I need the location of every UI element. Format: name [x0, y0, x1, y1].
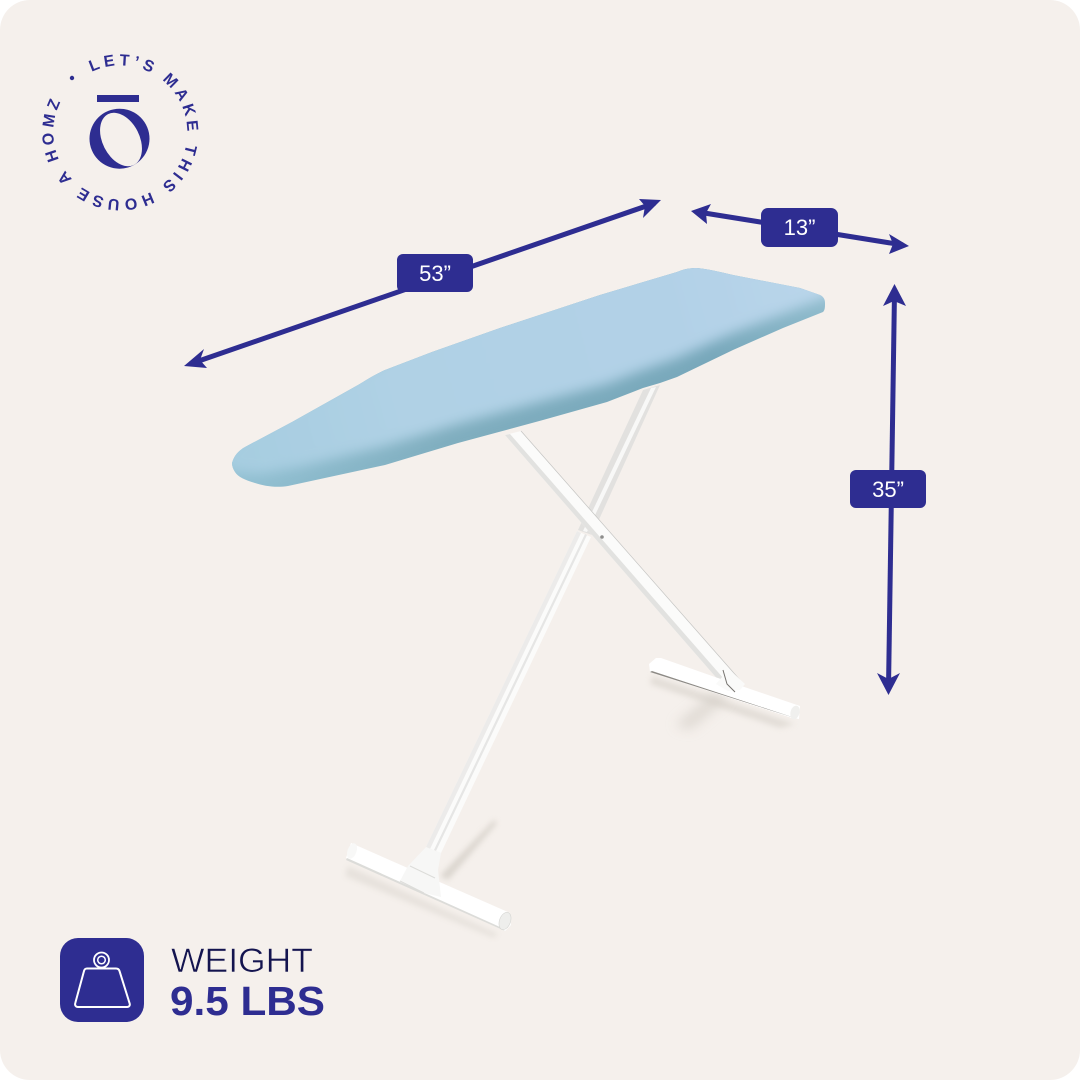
front foot	[345, 842, 513, 931]
weight heading: WEIGHT	[171, 942, 313, 980]
dimension: height 35 inches	[850, 284, 926, 695]
circular slogan: LET’S MAKE THIS HOUSE A HOMZ	[42, 54, 198, 210]
front long leg	[426, 531, 591, 853]
icon: weight	[60, 938, 144, 1022]
width label	[761, 208, 838, 247]
rear foot	[649, 658, 801, 720]
length label	[397, 254, 473, 292]
length arrow	[184, 199, 661, 368]
logo ring	[90, 106, 150, 173]
height arrow	[877, 284, 906, 695]
dimension: length 53 inches	[184, 199, 661, 368]
dimension: height 35 inches: 35”	[872, 477, 904, 502]
ironing board cover	[232, 268, 825, 487]
height label	[850, 470, 926, 508]
rear leg	[578, 385, 660, 535]
logo bar	[97, 95, 139, 102]
ironing board stand	[345, 385, 801, 938]
width arrow	[691, 204, 909, 254]
floor shadows	[345, 676, 795, 938]
dimension: length 53 inches: 53”	[419, 261, 451, 286]
slogan dot	[70, 76, 74, 80]
dimension: width 13 inches	[691, 204, 909, 254]
weight value: 9.5 LBS	[170, 978, 325, 1024]
weight callout	[60, 938, 325, 1024]
dimension: width 13 inches: 13”	[784, 215, 815, 240]
cross leg	[505, 431, 740, 690]
logo badge	[42, 54, 198, 210]
